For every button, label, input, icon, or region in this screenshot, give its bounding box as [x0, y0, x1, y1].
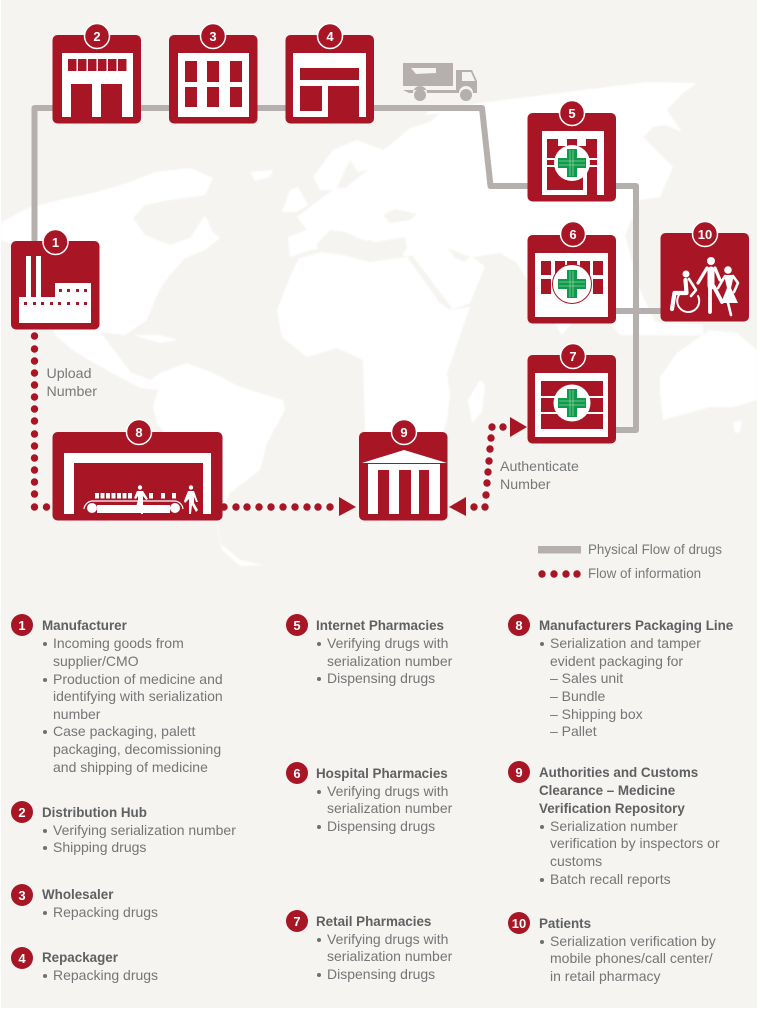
text block 2: distribution hub	[11, 801, 236, 855]
text block 9: authorities and customs: Authorities and Customs	[539, 765, 698, 780]
text block 8: manufacturers packaging line: 8	[515, 618, 523, 633]
label: authenticate number: Authenticate	[500, 459, 579, 475]
information flow: arrow from 8 to 9	[220, 497, 356, 516]
text block 2: distribution hub: Verifying serialization number	[53, 822, 236, 838]
text block 7: retail pharmacies: Retail Pharmacies	[316, 914, 431, 929]
label: authenticate number	[500, 459, 579, 493]
text block 1: manufacturer: 1	[18, 618, 26, 633]
text block 7: retail pharmacies	[286, 910, 453, 982]
text block 6: hospital pharmacies: serialization number	[327, 800, 453, 816]
text block 1: manufacturer: identifying with serialization	[53, 688, 223, 704]
icon: truck	[403, 63, 477, 101]
text block 9: authorities and customs: Clearance – Medicine	[539, 783, 675, 798]
icon 8: packaging line	[52, 420, 222, 520]
text block 4: repackager: Repackager	[42, 950, 119, 965]
text block 7: retail pharmacies: Verifying drugs with	[327, 931, 448, 947]
icon 4: repackager	[286, 24, 374, 124]
text block 6: hospital pharmacies: Verifying drugs with	[327, 783, 448, 799]
text block 2: distribution hub: 2	[18, 805, 26, 820]
icon 10: patients	[660, 222, 749, 322]
icon 4: repackager: 4	[326, 29, 334, 44]
text block 8: manufacturers packaging line: – Sales unit	[550, 670, 623, 686]
text block 4: repackager	[11, 947, 158, 983]
icon 3: wholesaler	[169, 24, 258, 124]
text block 5: internet pharmacies: serialization number	[327, 653, 453, 669]
icon 1: manufacturer	[11, 230, 100, 330]
text block 1: manufacturer: supplier/CMO	[53, 653, 139, 669]
label: upload number	[46, 366, 97, 400]
text block 8: manufacturers packaging line: Serialization and tamper	[550, 635, 701, 651]
text block 3: wholesaler	[11, 884, 158, 920]
text block 10: patients: Serialization verification by	[550, 933, 716, 949]
text block 10: patients: mobile phones/call center/	[550, 950, 713, 966]
icon 9: authorities: 9	[400, 425, 408, 440]
text block 6: hospital pharmacies: Hospital Pharmacies	[316, 766, 448, 781]
text block 8: manufacturers packaging line: – Pallet	[550, 723, 597, 739]
text block 2: distribution hub: Shipping drugs	[53, 839, 146, 855]
text block 10: patients: in retail pharmacy	[550, 968, 660, 984]
text block 1: manufacturer: Case packaging, palett	[53, 723, 196, 739]
information flow: two way arrow 9 and 7	[449, 417, 527, 516]
text block 7: retail pharmacies: serialization number	[327, 948, 453, 964]
text block 8: manufacturers packaging line: – Shipping box	[550, 706, 643, 722]
text block 4: repackager: 4	[18, 951, 26, 966]
information flow: upload number dots	[31, 332, 50, 511]
text block 6: hospital pharmacies: 6	[293, 766, 301, 781]
text block 3: wholesaler: 3	[18, 888, 26, 903]
text block 1: manufacturer: Production of medicine and	[53, 671, 223, 687]
legend: Flow of information	[588, 566, 701, 581]
text block 9: authorities and customs: customs	[550, 853, 602, 869]
text block 9: authorities and customs: Verification Repository	[539, 801, 685, 816]
icon 2: distribution hub: 2	[93, 29, 101, 44]
icon 9: authorities	[359, 420, 448, 520]
text block 7: retail pharmacies: 7	[293, 914, 301, 929]
icon 6: hospital pharmacies: 6	[569, 227, 577, 242]
icon 8: packaging line: 8	[135, 425, 143, 440]
text block 9: authorities and customs: 9	[515, 765, 523, 780]
legend: Physical Flow of drugs	[588, 542, 722, 557]
text block 10: patients: 10	[512, 916, 526, 931]
world map background	[1, 82, 757, 566]
label: upload number: Upload	[46, 366, 91, 382]
text block 5: internet pharmacies	[286, 614, 453, 686]
text block 1: manufacturer: packaging, decomissioning	[53, 741, 221, 757]
text block 5: internet pharmacies: Internet Pharmacies	[316, 618, 444, 633]
icon 5: internet pharmacies	[528, 100, 616, 202]
text block 9: authorities and customs: Batch recall reports	[550, 871, 671, 887]
physical flow lines	[34, 108, 665, 430]
text block 9: authorities and customs: Serialization number	[550, 818, 678, 834]
text block 8: manufacturers packaging line	[508, 614, 733, 739]
text block 4: repackager: Repacking drugs	[53, 967, 158, 983]
text block 1: manufacturer: and shipping of medicine	[53, 759, 208, 775]
text block 8: manufacturers packaging line: Manufacturers Packaging Line	[539, 618, 733, 633]
icon 5: internet pharmacies: 5	[568, 106, 576, 121]
icon 6: hospital pharmacies	[528, 222, 616, 324]
text block 1: manufacturer	[11, 614, 223, 775]
text block 10: patients	[508, 912, 716, 984]
label: upload number: Number	[46, 384, 97, 400]
label: authenticate number: Number	[500, 477, 551, 493]
text block 5: internet pharmacies: Verifying drugs with	[327, 635, 448, 651]
text block 10: patients: Patients	[539, 916, 591, 931]
text block 9: authorities and customs	[508, 761, 720, 887]
text block 3: wholesaler: Repacking drugs	[53, 904, 158, 920]
legend	[538, 542, 722, 581]
icon 7: retail pharmacies: 7	[569, 349, 577, 364]
text block 5: internet pharmacies: 5	[293, 618, 301, 633]
text block 1: manufacturer: number	[53, 706, 101, 722]
text block 6: hospital pharmacies	[286, 762, 453, 834]
icon 2: distribution hub	[52, 24, 141, 124]
icon 10: patients: 10	[698, 227, 712, 242]
icon 3: wholesaler: 3	[209, 29, 217, 44]
text block 9: authorities and customs: verification by inspectors or	[550, 835, 720, 851]
text block 6: hospital pharmacies: Dispensing drugs	[327, 818, 435, 834]
text block 7: retail pharmacies: Dispensing drugs	[327, 966, 435, 982]
icon 7: retail pharmacies	[528, 344, 616, 444]
text block 8: manufacturers packaging line: – Bundle	[550, 688, 605, 704]
text block 2: distribution hub: Distribution Hub	[42, 805, 147, 820]
text block 1: manufacturer: Manufacturer	[42, 618, 128, 633]
icon 1: manufacturer: 1	[52, 235, 59, 250]
text block 3: wholesaler: Wholesaler	[42, 887, 114, 902]
text block 5: internet pharmacies: Dispensing drugs	[327, 670, 435, 686]
text block 8: manufacturers packaging line: evident packaging for	[550, 653, 683, 669]
text block 1: manufacturer: Incoming goods from	[53, 635, 184, 651]
